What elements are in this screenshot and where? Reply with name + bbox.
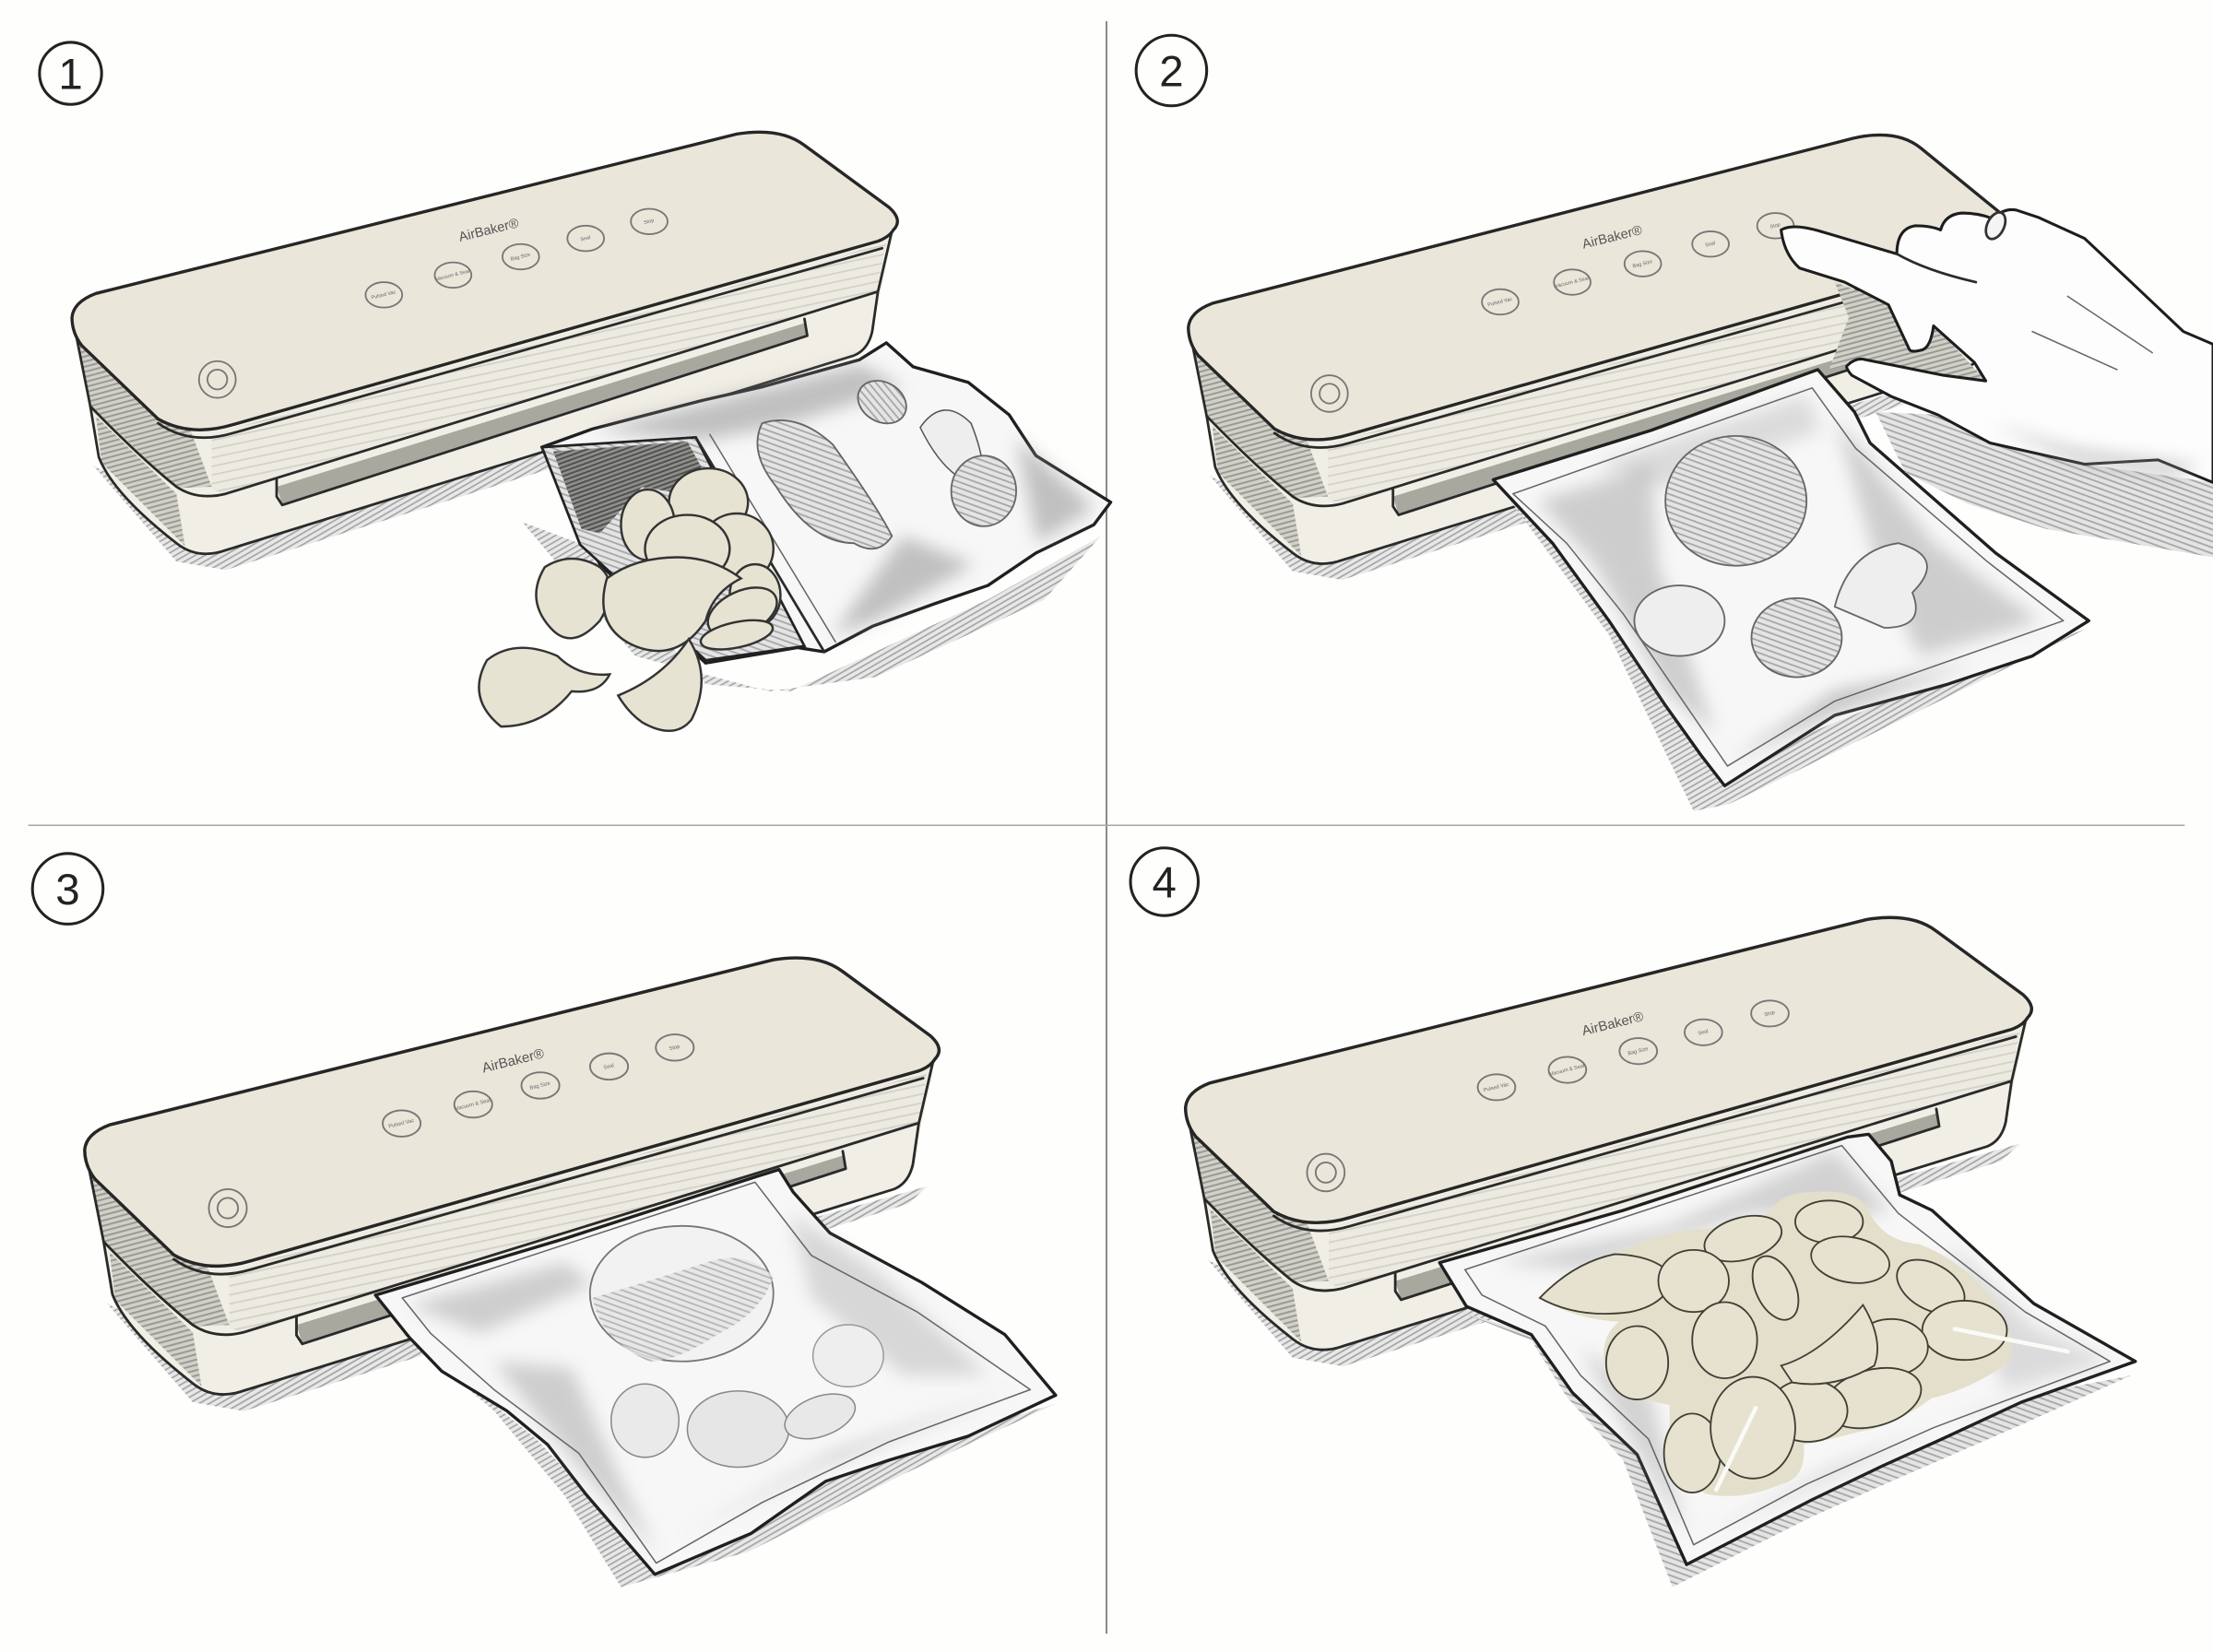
arm shadow (1876, 412, 2213, 557)
step number 3 (32, 854, 103, 924)
control buttons: Vacuum & Seal (435, 269, 470, 282)
panel: step 3 (32, 854, 1056, 1587)
power button (1307, 1154, 1344, 1191)
bag shadow (522, 522, 1101, 691)
panel: step 2 (1136, 35, 2213, 811)
control buttons: Stop (669, 1044, 680, 1052)
step number 2 (1136, 35, 1207, 106)
brand name: AirBaker® (480, 1045, 546, 1076)
panel: step 4 (1130, 848, 2136, 1587)
control buttons (1478, 1000, 1789, 1100)
vacuum sealer machine (85, 958, 939, 1411)
vacuum sealer machine (72, 132, 897, 570)
control buttons: Seal (580, 235, 591, 242)
control buttons: Bag Size (1632, 259, 1653, 269)
panel: step 1 (40, 42, 1111, 731)
control buttons: Seal (1698, 1029, 1709, 1037)
control buttons (383, 1034, 693, 1137)
control buttons: Vacuum & Seal (1549, 1064, 1585, 1078)
brand name: AirBaker® (1580, 223, 1644, 253)
control buttons: Stop (1769, 222, 1781, 230)
step number 1 (40, 42, 101, 104)
step number 3: 3 (55, 866, 80, 914)
control buttons: Bag Size (510, 253, 531, 263)
power button (1311, 375, 1348, 412)
control buttons (365, 208, 668, 308)
bag print (590, 1226, 883, 1468)
chip bag feeding into sealer (1493, 370, 2089, 785)
vacuum sealed bag of chips (1439, 1134, 2136, 1564)
bag shadow (1510, 501, 2089, 811)
step number 4 (1130, 848, 1198, 915)
control buttons (1482, 213, 1793, 314)
brand name: AirBaker® (457, 216, 521, 245)
vertical divider (1106, 21, 1107, 1634)
bag print (1634, 436, 1927, 678)
vacuum sealer machine (1186, 917, 2031, 1366)
power button (208, 1189, 247, 1227)
brand name: AirBaker® (1580, 1009, 1645, 1039)
spilled chips (479, 557, 741, 731)
control buttons: Stop (644, 218, 655, 226)
control buttons: Seal (603, 1063, 615, 1071)
chips inside bag (621, 468, 785, 655)
control buttons: Seal (1705, 241, 1716, 249)
step number 2: 2 (1159, 47, 1184, 96)
open chip bag (542, 343, 1111, 663)
ring on finger (1982, 209, 2009, 242)
plastic highlights (1716, 1329, 2067, 1490)
control buttons: Stop (1764, 1010, 1776, 1018)
vacuum sealer machine (1189, 135, 2014, 580)
control buttons: Pulsed Vac (388, 1118, 415, 1130)
step number 4: 4 (1153, 858, 1177, 907)
step number 1: 1 (58, 50, 83, 99)
control buttons: Bag Size (1627, 1046, 1649, 1056)
horizontal divider (29, 824, 2184, 826)
control buttons: Bag Size (529, 1080, 551, 1092)
power button (199, 361, 236, 398)
hand pressing button (1781, 209, 2213, 482)
control buttons: Pulsed Vac (1487, 297, 1513, 308)
control buttons: Vacuum & Seal (1555, 276, 1590, 289)
bag print (757, 372, 1016, 549)
control buttons: Vacuum & Seal (455, 1098, 491, 1112)
compressed chips (1540, 1191, 2012, 1496)
deflating bag under vacuum (375, 1170, 1056, 1575)
bag shadow (402, 1333, 1056, 1587)
bag shadow (1461, 1312, 2131, 1587)
control buttons: Pulsed Vac (1483, 1082, 1509, 1093)
shaded gap between fingers (1829, 282, 1986, 381)
control buttons: Pulsed Vac (371, 289, 396, 301)
